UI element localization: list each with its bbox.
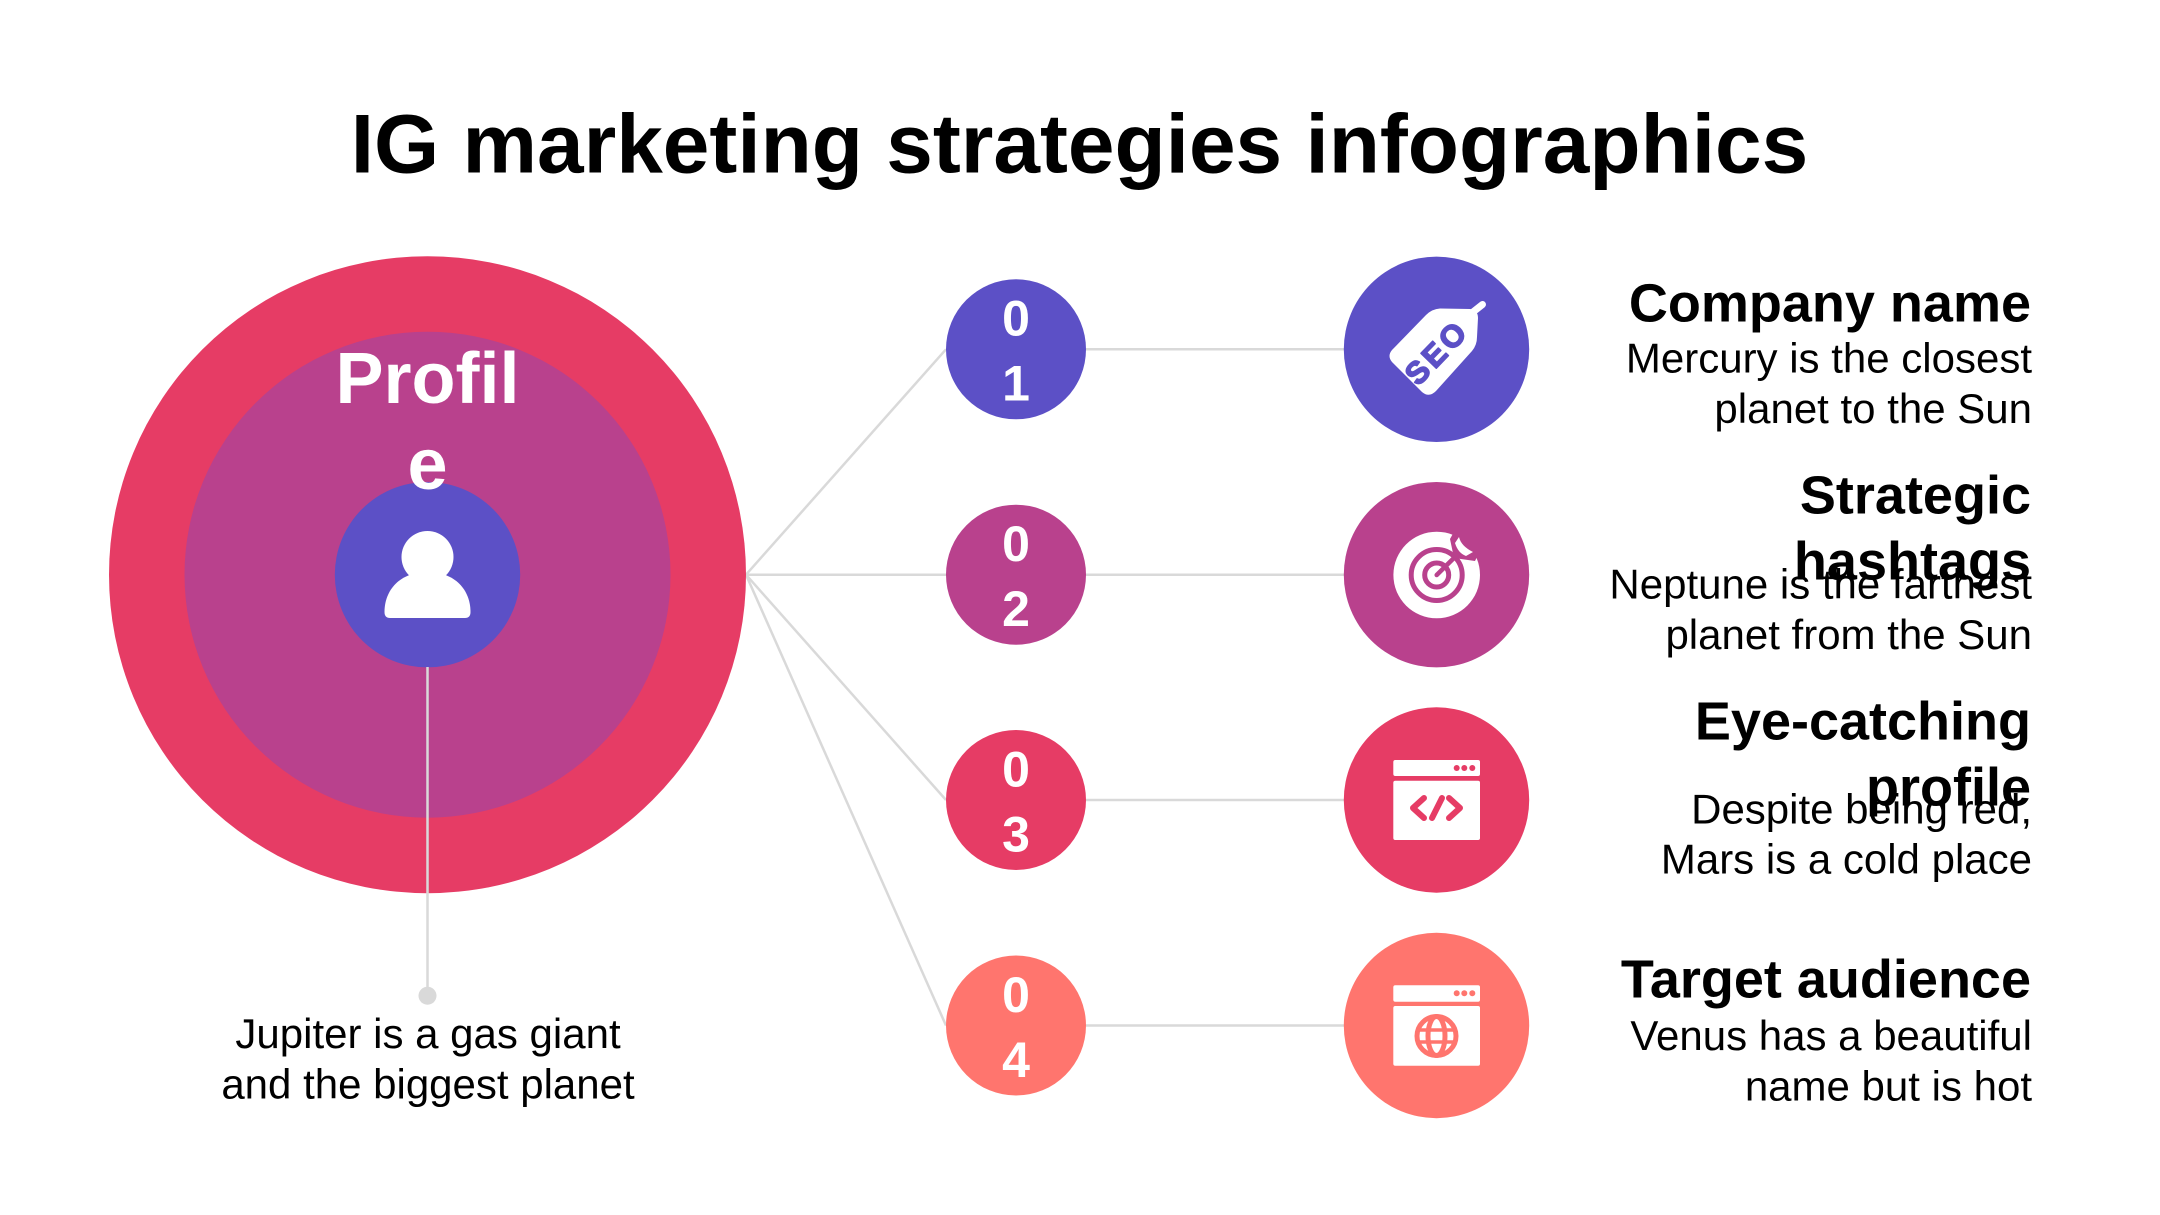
- item 1 text: Company name: [1629, 274, 2031, 334]
- icon: code window: [1344, 707, 1529, 893]
- connector lines: [746, 349, 1345, 1026]
- icon: SEO tag: [1344, 257, 1529, 442]
- number badge 01: [946, 279, 1086, 419]
- item 1 text: [1626, 274, 2032, 432]
- item 4 text: [1621, 950, 2032, 1109]
- number badge 01: 1: [1002, 356, 1030, 412]
- item 2 text: Strategic: [1800, 466, 2031, 526]
- profile concentric circles: [109, 256, 746, 893]
- item 3 text: Despite being red,: [1691, 786, 2032, 832]
- item 1 text: planet to the Sun: [1714, 385, 2032, 432]
- icon: person: [384, 531, 470, 618]
- number badge 04: [946, 956, 1086, 1096]
- item 4 text: Target audience: [1621, 950, 2031, 1010]
- profile description: Jupiter is a gas giant: [235, 1010, 621, 1057]
- item 3 text: Mars is a cold place: [1661, 836, 2032, 882]
- profile description: and the biggest planet: [221, 1061, 635, 1108]
- icon: target with arrow: [1344, 482, 1529, 667]
- number badge 04: 4: [1002, 1032, 1030, 1088]
- icon: SEO tag: SEO: [1398, 313, 1476, 392]
- title: IG marketing strategies infographics: [351, 96, 1808, 190]
- number badge 02: [946, 505, 1086, 645]
- item 3 text: profile: [1866, 758, 2031, 818]
- profile pointer line and dot: [418, 667, 436, 1005]
- profile heading: Profil: [335, 339, 520, 419]
- item 4 text: name but is hot: [1745, 1062, 2032, 1109]
- number badge 02: 0: [1002, 516, 1030, 572]
- number badge 02: 2: [1002, 581, 1030, 637]
- item 4 text: Venus has a beautiful: [1630, 1012, 2032, 1059]
- number badge 04: 0: [1002, 967, 1030, 1023]
- item 2 text: planet from the Sun: [1665, 611, 2032, 658]
- number badge 03: [946, 730, 1086, 870]
- profile heading: e: [407, 425, 448, 505]
- icon: globe window: [1344, 933, 1529, 1118]
- item 3 text: [1661, 692, 2032, 882]
- number badge 01: 0: [1002, 290, 1030, 346]
- number badge 03: 3: [1002, 806, 1030, 862]
- item 2 text: Neptune is the farthest: [1609, 560, 2032, 608]
- item 2 text: [1609, 466, 2032, 658]
- number badge 03: 0: [1002, 741, 1030, 797]
- item 2 text: hashtags: [1794, 532, 2031, 592]
- item 1 text: Mercury is the closest: [1626, 334, 2032, 382]
- item 3 text: Eye-catching: [1695, 692, 2031, 752]
